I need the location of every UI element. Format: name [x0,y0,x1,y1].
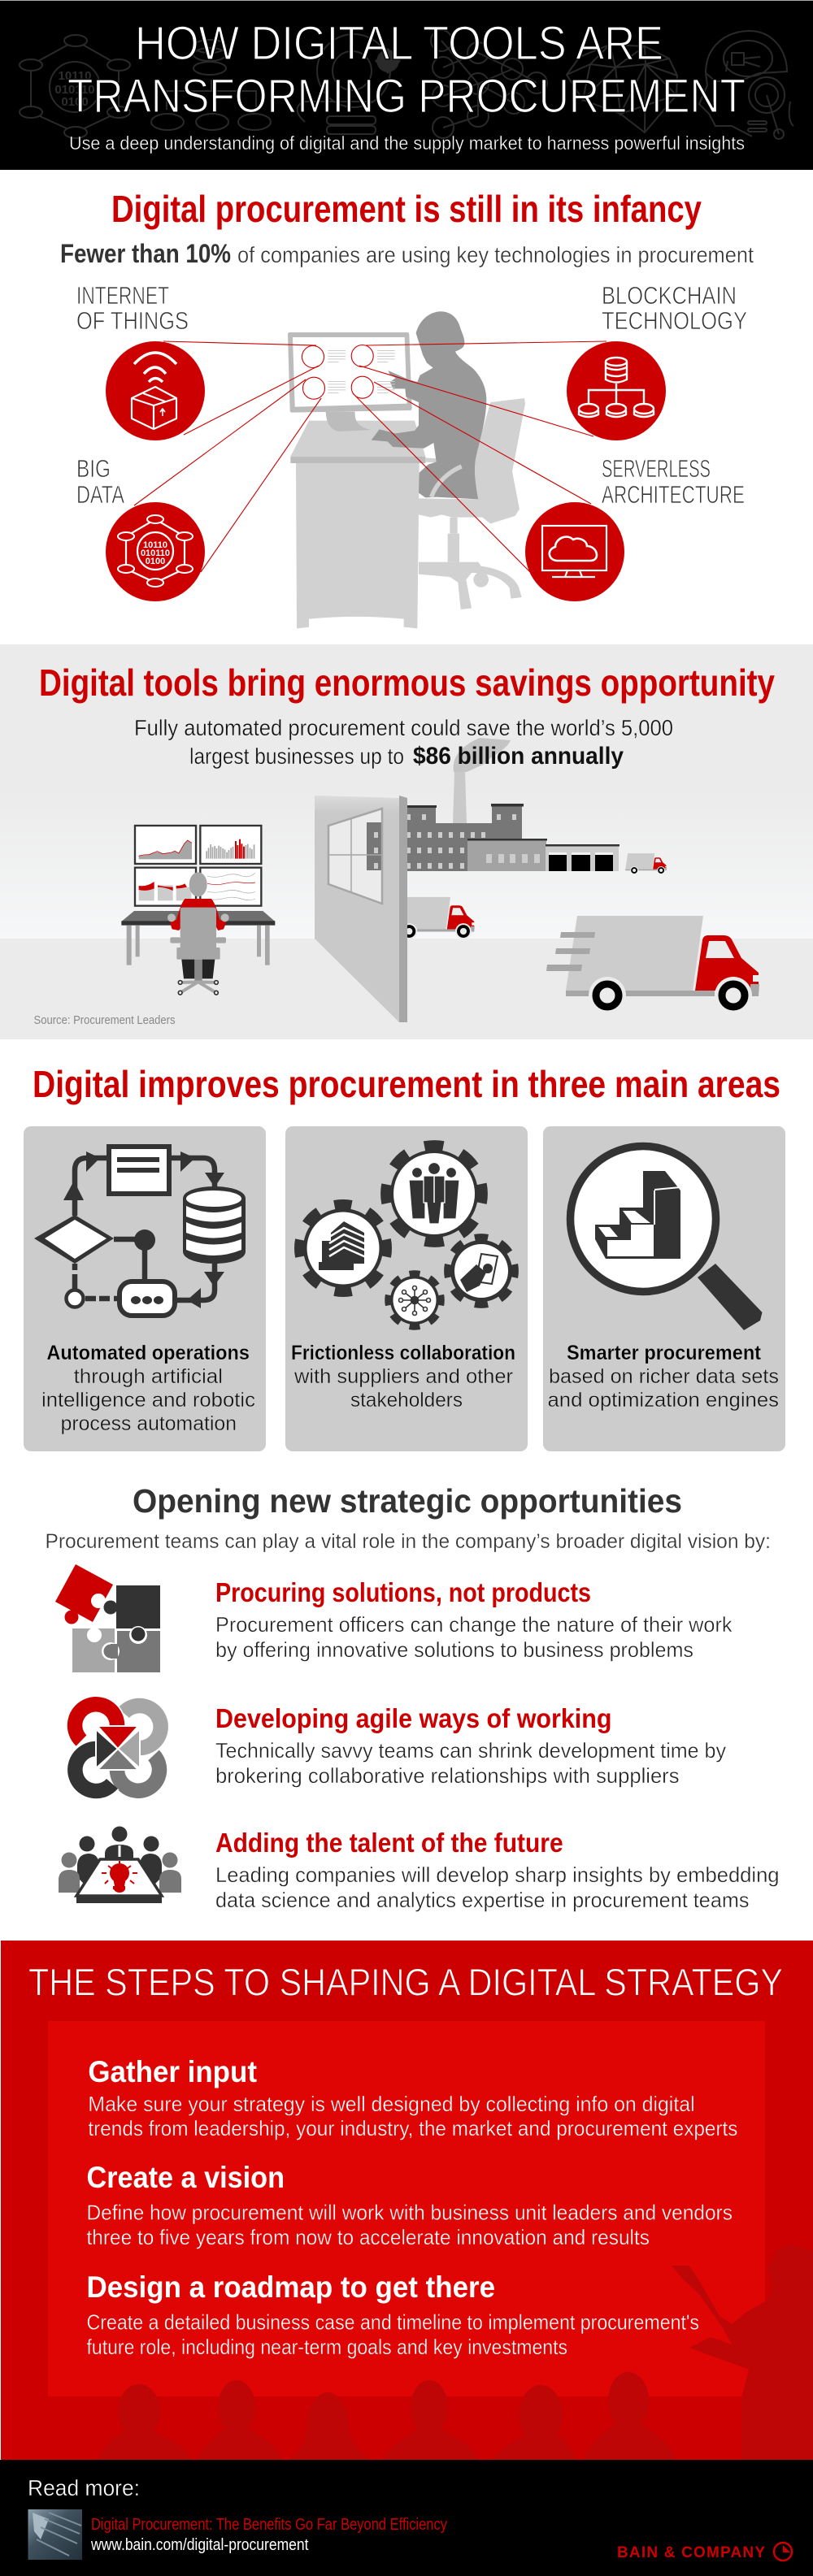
step: create a vision [86,2161,733,2249]
item text [215,1863,779,1912]
item: agile ways of working [75,1703,726,1791]
footer [0,2460,813,2576]
binary digits: 0100 [146,557,165,566]
source note: Source: Procurement Leaders [34,1013,176,1027]
report thumbnail [28,2509,82,2560]
item heading: Adding the talent of the future [215,1828,563,1858]
icon: gear with network [388,1273,441,1327]
card text: stakeholders [350,1389,463,1412]
item text: Technically savvy teams can shrink development time by [215,1738,726,1763]
card text: with suppliers and other [293,1365,513,1388]
chart: bars [206,839,254,859]
icon: internet of things [106,341,205,440]
card: automated operations [24,1126,266,1451]
label: blockchain technology: BLOCKCHAIN [602,281,737,310]
truck: medium [391,897,475,939]
step: create a vision: Define how procurement will work with business unit leaders and vendors [86,2201,733,2225]
item text: Procurement officers can change the nature of their work [215,1612,733,1637]
read more label: Read more: [28,2475,140,2500]
item heading: Developing agile ways of working [215,1703,611,1733]
key statistic line: of companies are using key technologies in procurement [237,242,754,267]
key statistic line: Fewer than 10% [60,239,231,268]
icon: serverless cloud [525,502,624,601]
step: create a vision: three to five years from now to accelerate innovation and results [86,2225,650,2249]
panel: digital procurement infancy [60,188,754,628]
step: gather input: Gather input [88,2055,257,2088]
truck: large with speed lines [546,916,759,1014]
title: TRANSFORMING PROCUREMENT [67,70,746,123]
label: internet of things: INTERNET [76,281,169,310]
brand logo: BAIN & COMPANY [617,2544,765,2561]
person silhouette [372,311,486,499]
step: design a roadmap: Create a detailed business case and timeline to implement procurement's [86,2310,699,2335]
card text: Frictionless collaboration [291,1342,515,1364]
binary digits [54,69,95,109]
chair [419,398,525,609]
card text: intelligence and robotic [41,1389,255,1412]
desk [290,421,425,457]
card text: Smarter procurement [567,1342,762,1364]
item text: by offering innovative solutions to business problems [215,1637,693,1662]
illustration: audience silhouettes [98,2372,675,2460]
chart: blocks [139,882,191,900]
body text: savings: largest businesses up to [189,744,404,769]
binary digits: 010110 [54,83,95,97]
icon: puzzle [55,1564,160,1672]
label: big data [76,454,124,509]
card text: based on richer data sets [549,1365,779,1388]
step: create a vision: Create a vision [86,2161,285,2194]
card text [548,1342,779,1412]
title [67,17,746,123]
binary digits: 0100 [61,95,89,109]
illustration: presenter silhouette [672,2244,813,2460]
card: frictionless collaboration [285,1126,528,1451]
illustration: person at desk [288,311,525,628]
label: big data: BIG [76,454,111,483]
callout lines [134,341,606,576]
item: talent of the future [59,1827,779,1912]
binary digits: 010110 [141,549,170,558]
panel: three main areas [24,1063,785,1451]
subtitle: Use a deep understanding of digital and the supply market to harness powerful insights [69,132,745,154]
icon: gear with payment [448,1238,515,1304]
step: design a roadmap: Design a roadmap to get there [86,2270,495,2304]
heading: Digital procurement is still in its infancy [111,188,702,230]
panel: savings opportunity [0,644,813,1039]
step: gather input: Make sure your strategy is well designed by collecting info on digital [88,2092,695,2116]
label: serverless architecture [602,454,745,509]
binary digits: 10110 [143,540,167,550]
heading: Opening new strategic opportunities [133,1482,682,1520]
card text: Automated operations [46,1342,250,1364]
icon: process flow [34,1147,246,1316]
card text: through artificial [74,1365,223,1388]
card text: and optimization engines [548,1389,779,1412]
header band [0,0,813,170]
item text: data science and analytics expertise in procurement teams [215,1888,750,1912]
operator [170,899,226,930]
key statistic line [60,239,754,268]
desk [121,911,275,922]
icon: big data [106,502,205,601]
card text [41,1342,255,1435]
card text [291,1342,515,1412]
monitor [326,412,372,432]
item heading: Procuring solutions, not products [215,1577,591,1607]
body text: savings: $86 billion annually [413,743,624,770]
step: gather input [88,2055,737,2140]
item text: brokering collaborative relationships with suppliers [215,1763,680,1788]
label: blockchain technology: TECHNOLOGY [602,306,747,335]
icon: meeting with light bulb [59,1827,181,1903]
chart: lines [207,873,255,900]
icon: magnifier with bars [571,1146,763,1330]
label: big data: DATA [76,480,124,509]
illustration: operator at monitors [121,826,275,995]
panel: strategic opportunities [46,1482,779,1912]
screen text lines [328,350,395,393]
title: HOW DIGITAL TOOLS ARE [135,17,663,70]
label: internet of things [76,281,189,335]
panel: steps to shaping a digital strategy [1,1941,813,2460]
report link text [90,2516,447,2554]
label: serverless architecture: ARCHITECTURE [602,480,745,509]
item: procuring solutions [55,1564,733,1672]
icon: gear with building [299,1204,387,1292]
icon: gear with people [386,1146,482,1242]
card text: process automation [61,1412,237,1435]
binary digits [141,540,170,566]
label: serverless architecture: SERVERLESS [602,454,711,483]
item text [215,1738,726,1788]
monitors [135,826,261,906]
report link text: www.bain.com/digital-procurement [90,2536,309,2554]
wall with window [315,796,407,1022]
intro text: Procurement teams can play a vital role in the company’s broader digital vision by: [46,1530,771,1553]
label: blockchain technology [602,281,747,335]
step: gather input: trends from leadership, your industry, the market and procurement experts [88,2116,737,2140]
label: internet of things: OF THINGS [76,306,189,335]
item text [215,1612,733,1662]
report link text: Digital Procurement: The Benefits Go Far Beyond Efficiency [91,2516,447,2534]
truck: small [625,853,667,874]
step: design a roadmap [86,2270,699,2359]
body text: savings: Fully automated procurement could save the world’s 5,000 [134,715,673,740]
icon: linked arrows [75,1704,161,1791]
step: design a roadmap: future role, including near-term goals and key investments [86,2335,567,2359]
factory [406,738,620,871]
body text: savings [134,715,673,770]
item text: Leading companies will develop sharp insights by embedding [215,1863,779,1887]
chart: area [139,840,192,859]
faded background icons [20,30,793,139]
card: smarter procurement [543,1126,785,1451]
icon: blockchain [567,341,666,440]
binary digits: 10110 [59,69,91,83]
